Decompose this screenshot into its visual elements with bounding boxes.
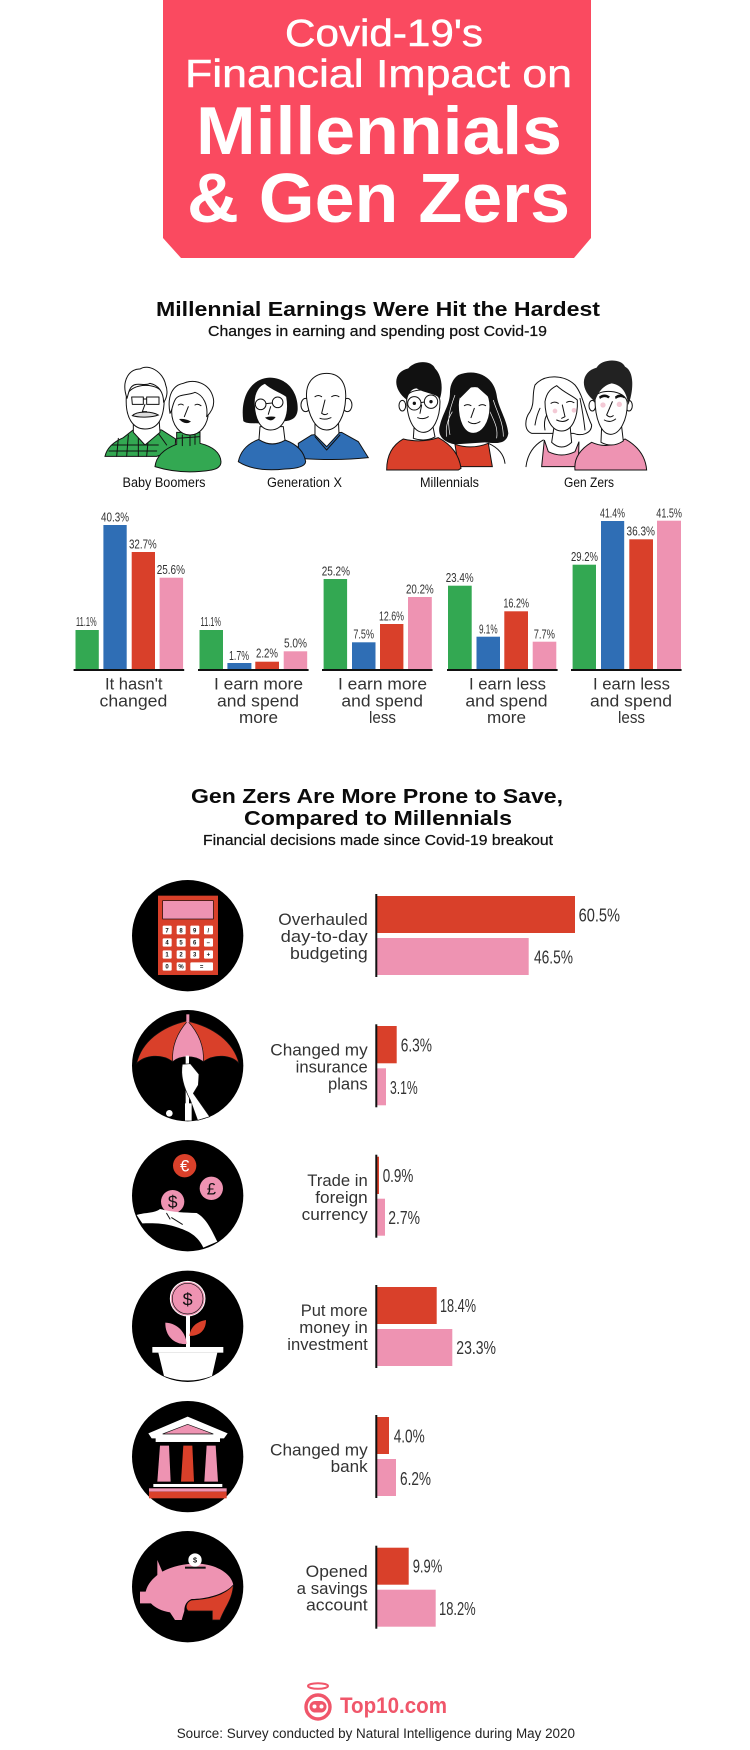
logo: Top10.com [306,1683,447,1719]
row: Opened a savings account: 9.9% [413,1557,442,1577]
icon: coins in hand: € [180,1157,190,1176]
bar chart group: I earn more and spend more: 2.2% [256,647,278,661]
heading: earnings section [156,298,600,340]
bar chart group: I earn less and spend less: 41.4% [600,507,625,521]
row: Opened a savings account: account [306,1597,368,1615]
heading: financial decisions section [191,785,563,849]
bar chart group: I earn more and spend less: and spend [341,693,423,711]
icon: calculator: 0 [165,965,169,971]
row: Trade in foreign currency: 2.7% [388,1208,420,1228]
bar chart group: I earn more and spend less: 7.5% [353,628,374,642]
bar chart group: I earn less and spend less: less [618,709,645,727]
icon: coins in hand [132,1140,243,1251]
label: Millennials: Millennials [420,475,479,490]
icon: piggy bank: $ [193,1556,197,1565]
row: Changed my insurance plans: 6.3% [401,1036,432,1056]
icon: money plant: $ [183,1289,193,1309]
row: Changed my bank: 4.0% [394,1427,425,1447]
row: Overhauled day-to-day budgeting: budgeting [290,945,368,963]
bar chart group: I earn more and spend less: 12.6% [379,610,404,624]
logo: Top10.com: Top10.com [340,1693,447,1718]
bar chart group: I earn more and spend more: 1.7% [229,649,249,663]
row: Put more money in investment: money in [299,1319,368,1337]
icon: calculator: 3 [193,953,197,959]
source line: Source: Survey conducted by Natural Intelligence during May 2020 [177,1726,575,1741]
row: Opened a savings account [297,1546,476,1629]
bar chart group: I earn more and spend more [198,615,309,727]
icon: calculator: 6 [193,941,197,947]
bar chart group: It hasn't changed: 32.7% [129,538,157,552]
bar chart group: I earn less and spend more: 9.1% [479,622,498,636]
bar chart group: It hasn't changed [74,511,185,711]
icon: bank [132,1401,243,1512]
row: Put more money in investment: 18.4% [440,1296,476,1316]
row: Changed my bank [270,1415,431,1498]
title banner [163,0,591,258]
row: Changed my insurance plans: insurance [296,1059,368,1077]
icon: calculator: 1 [165,953,169,959]
bar chart group: I earn less and spend more: 16.2% [503,597,529,611]
heading: financial decisions section: Compared to Millennials [244,807,512,830]
row: Trade in foreign currency [302,1155,420,1238]
row: Changed my bank: 6.2% [400,1469,431,1489]
heading: earnings section: Changes in earning and spending post Covid-19 [208,324,547,340]
heading: financial decisions section: Financial decisions made since Covid-19 breakout [203,833,553,849]
bar chart group: I earn less and spend more [446,571,558,727]
bar chart group: It hasn't changed: 40.3% [101,511,129,525]
row: Overhauled day-to-day budgeting: Overhauled [278,911,368,929]
bar chart group: I earn less and spend more: 7.7% [534,627,555,641]
row: Trade in foreign currency: foreign [315,1189,368,1207]
icon: calculator: 2 [179,953,183,959]
bar chart group: I earn less and spend less: 41.5% [656,506,682,520]
illustration: Gen Zers [526,361,647,470]
heading: earnings section: Millennial Earnings Were Hit the Hardest [156,298,600,321]
icon: calculator: / [207,928,209,934]
icon: calculator: % [178,965,184,971]
bar chart group: I earn more and spend less: 25.2% [322,565,350,579]
row: Overhauled day-to-day budgeting [278,894,620,977]
bar chart group: It hasn't changed: 11.1% [76,615,97,629]
bar chart group: I earn less and spend more: I earn less [469,675,546,693]
bar chart group: I earn more and spend more: I earn more [214,675,303,693]
bar chart group: I earn less and spend more: more [487,709,526,727]
row: Opened a savings account: a savings [297,1580,368,1598]
icon: calculator: 4 [165,941,169,947]
icon: piggy bank [132,1531,243,1642]
row: Trade in foreign currency: 0.9% [383,1166,413,1186]
bar chart group: I earn less and spend less [571,506,682,727]
bar chart group: I earn less and spend less: 29.2% [571,550,598,564]
title banner: Financial Impact on [185,53,572,96]
row: Overhauled day-to-day budgeting: 46.5% [534,948,573,968]
bar chart group: I earn more and spend more: more [239,709,278,727]
bar chart group: I earn less and spend less: I earn less [593,675,670,693]
row: Changed my insurance plans [270,1024,432,1107]
icon: calculator [132,880,243,991]
row: Put more money in investment: Put more [301,1302,368,1320]
row: Changed my bank: Changed my [270,1441,368,1459]
bar chart group: I earn less and spend more: 23.4% [446,571,474,585]
bar chart group: I earn less and spend less: and spend [590,693,672,711]
row: Put more money in investment: 23.3% [456,1338,496,1358]
icon: money plant [132,1271,243,1382]
bar chart group: I earn more and spend more: 5.0% [284,637,307,651]
label: Gen Zers: Gen Zers [564,475,614,490]
bar chart group: I earn more and spend less: I earn more [338,675,427,693]
icon: coins in hand: $ [168,1192,178,1212]
icon: calculator: + [207,953,211,959]
icon: calculator: = [200,965,204,971]
row: Opened a savings account: Opened [306,1563,368,1581]
title banner: & Gen Zers [187,159,570,237]
row: Overhauled day-to-day budgeting: day-to-day [281,928,369,946]
label: Generation X: Generation X [267,475,342,490]
row: Changed my insurance plans: 3.1% [390,1078,418,1098]
row: Changed my insurance plans: Changed my [270,1042,368,1060]
bar chart group: I earn more and spend more: and spend [217,693,299,711]
row: Opened a savings account: 18.2% [439,1599,476,1619]
illustration: Millennials [387,362,508,470]
bar chart group: It hasn't changed: 25.6% [157,563,185,577]
illustration: Generation X [238,373,368,470]
icon: calculator: 8 [179,928,183,934]
bar chart group: I earn more and spend less: less [369,709,396,727]
row: Changed my bank: bank [331,1458,368,1476]
row: Changed my insurance plans: plans [328,1076,368,1094]
heading: financial decisions section: Gen Zers Are More Prone to Save, [191,785,563,808]
bar chart group: It hasn't changed: It hasn't [105,675,163,693]
icon: calculator: 9 [193,928,197,934]
bar chart group: I earn less and spend less: 36.3% [626,524,655,538]
illustration: Baby Boomers [105,367,221,472]
icon: umbrella [132,1010,243,1121]
row: Trade in foreign currency: currency [302,1206,368,1224]
title banner: Covid-19's [285,13,483,55]
bar chart group: I earn more and spend less: 20.2% [406,582,434,596]
row: Put more money in investment [287,1285,496,1368]
icon: calculator: 5 [179,941,183,947]
row: Put more money in investment: investment [287,1336,368,1354]
bar chart group: I earn more and spend more: 11.1% [200,615,221,629]
icon: calculator: – [207,941,211,947]
label: Baby Boomers: Baby Boomers [122,475,206,490]
bar chart group: It hasn't changed: changed [100,693,167,711]
row: Trade in foreign currency: Trade in [307,1172,368,1190]
icon: coins in hand: £ [207,1179,216,1198]
title banner: Millennials [196,93,562,169]
row: Overhauled day-to-day budgeting: 60.5% [579,905,620,925]
icon: calculator: 7 [165,928,169,934]
bar chart group: I earn less and spend more: and spend [465,693,548,711]
bar chart group: I earn more and spend less [322,565,434,727]
